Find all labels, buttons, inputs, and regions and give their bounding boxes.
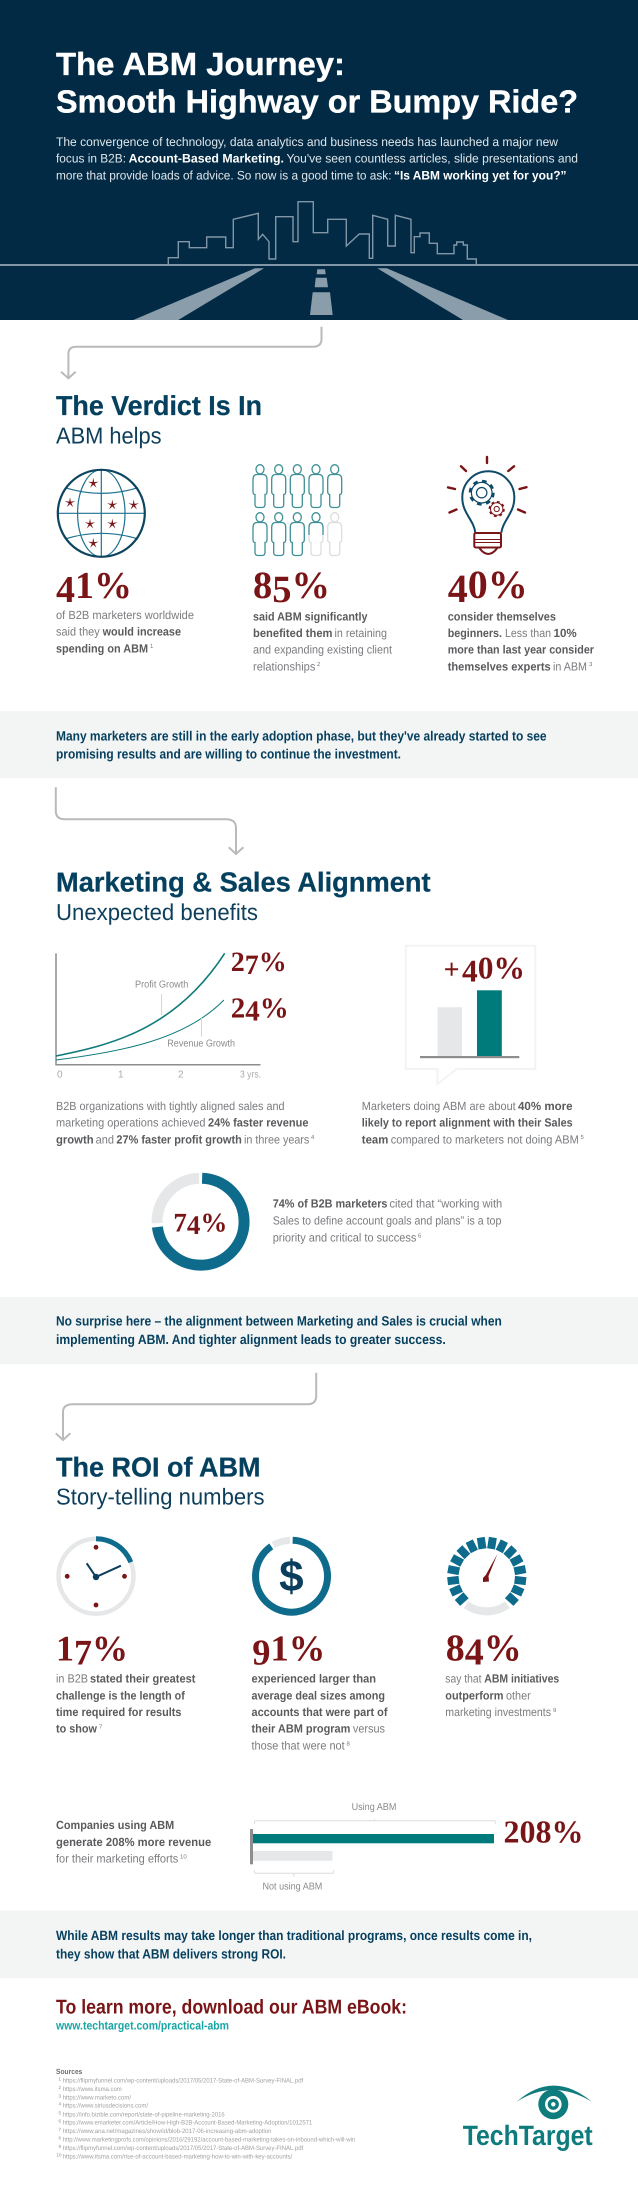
panel: the verdict is in (56, 390, 594, 673)
sources: 10 (56, 2152, 62, 2157)
stat: 41%: would increase (102, 625, 181, 639)
heading: The ROI of ABM (56, 1452, 260, 1483)
stat: 84%: ABM initiatives (484, 1671, 560, 1685)
stat: 85%: 5 (272, 569, 292, 611)
sources: https://flipmyfunnel.com/wp-content/uploads/2017/05/2017-State-of-ABM-Survey-FINAL.pdf (63, 2145, 303, 2152)
stat: 91%: versus (353, 1722, 385, 1736)
sources: 7 (58, 2127, 62, 2132)
donut chart: 74% (157, 1178, 244, 1265)
heading: Marketing & Sales Alignment (56, 867, 431, 898)
callout band: early adoption: promising results and are willing to continue the investment. (56, 747, 401, 762)
text: companies using ABM: 10 (180, 1854, 187, 1860)
subheading: Story-telling numbers (56, 1483, 264, 1509)
callout: +40% bar chart: 4 (462, 953, 478, 988)
line chart: growth: 7 (245, 950, 259, 981)
horizon line (0, 264, 638, 266)
title: Smooth Highway or Bumpy Ride? (56, 83, 578, 119)
text: 74% of B2B marketers: 74% of B2B marketers (273, 1197, 388, 1211)
stat: 41% (56, 565, 194, 655)
callout band: no surprise (0, 1297, 638, 1364)
text: faster growth: and (96, 1132, 114, 1146)
stat: 91%: 9 (252, 1632, 271, 1673)
callout band: early adoption (0, 711, 638, 778)
icon: light bulb (448, 457, 526, 554)
stat: 84%: 9 (553, 1707, 557, 1714)
text: report alignment: compared to marketers not doing ABM (391, 1132, 579, 1146)
sources: 1 (58, 2076, 62, 2082)
stat: 91%: their ABM program (252, 1722, 350, 1736)
panel: the ROI of ABM (56, 1452, 584, 1892)
bar chart: 208%: 208% (504, 1813, 584, 1849)
stat: 84%: other (506, 1688, 531, 1702)
stat: 40%: more than last year consider (448, 643, 594, 657)
stat: 40%: Less than (505, 626, 551, 640)
stat: 85%: in retaining (334, 626, 387, 640)
sources: https://www.emarketer.com/Article/How-High-B2B-Account-Based-Marketing-Adoption/1012571 (63, 2120, 313, 2127)
intro text: The convergence of technology, data analytics and business needs has launched a major new (56, 135, 558, 149)
stat: 17%: challenge is the length of (56, 1688, 185, 1702)
bar chart: 208%: Not using ABM (262, 1881, 322, 1892)
sources: https://www.itsma.com (63, 2086, 122, 2093)
stat: 40%: 10% (554, 626, 577, 640)
callout band: strong ROI (0, 1911, 638, 1978)
title: The ABM Journey: (56, 46, 345, 82)
stat: 40%: themselves experts (448, 659, 551, 673)
sources: Sources (56, 2067, 82, 2076)
stat: 91%: those that were not (252, 1739, 345, 1753)
stat: 91%: 1% (271, 1628, 325, 1669)
text: companies using ABM: Companies using ABM (56, 1818, 174, 1832)
call to action: www.techtarget.com/practical-abm (55, 2018, 229, 2032)
arrow: to marketing and sales (56, 787, 243, 854)
stat: 17%: 7 (74, 1633, 92, 1673)
stat: 91%: 8 (346, 1740, 350, 1748)
callout: +40% bar chart (406, 946, 535, 1084)
stat: 91%: accounts that were part of (252, 1705, 388, 1719)
text: companies using ABM (56, 1818, 212, 1866)
stat: 41%: said they (56, 625, 100, 639)
line chart: growth: 2 (178, 1069, 184, 1080)
icon: globe (58, 470, 145, 557)
line chart: growth: 4 (245, 996, 260, 1028)
stat: 41%: of B2B marketers worldwide (56, 608, 194, 622)
skyline (168, 202, 476, 265)
stat: 85%: relationships (253, 659, 315, 673)
text: 74% of B2B marketers: priority and critical to success (273, 1231, 416, 1245)
stat: 85% (253, 565, 393, 673)
intro text (56, 135, 578, 182)
stat: 84%: say that (445, 1671, 482, 1685)
stat: 40%: beginners. (448, 626, 502, 640)
arrow: to ROI (56, 1373, 316, 1440)
arrow: to verdict (61, 327, 322, 378)
call to action (55, 1996, 407, 2032)
donut chart: 74%: % (200, 1208, 227, 1238)
stat: 85%: % (292, 565, 330, 607)
text: 74% of B2B marketers: cited that “working with (390, 1197, 502, 1211)
donut chart: 74%: 7 (173, 1208, 187, 1238)
stat: 41%: spending on ABM (56, 641, 148, 655)
stat: 40% (448, 562, 594, 673)
call to action: To learn more, download our ABM eBook: (56, 1996, 407, 2018)
text: 74% of B2B marketers (273, 1197, 502, 1245)
line chart: growth: % (260, 993, 289, 1025)
text: faster growth: growth (56, 1132, 94, 1146)
sources: http://www.marketingprofs.com/opinions/2016/29192/account-based-marketing-takes-on-inbound-which-will-win (63, 2136, 356, 2143)
stat: 40%: in ABM (553, 659, 587, 673)
callout band: early adoption: Many marketers are still in the early adoption phase, but they've already started to see (56, 728, 547, 743)
text: faster growth: 27% faster profit growth (116, 1132, 242, 1146)
text: faster growth: 4 (311, 1134, 315, 1141)
callout band: strong ROI: While ABM results may take longer than traditional programs, once results come in, (56, 1928, 532, 1943)
stat: 85%: 8 (253, 565, 272, 607)
sources: 2 (58, 2085, 62, 2090)
stat: 85%: and expanding existing client (253, 643, 393, 657)
title (56, 46, 578, 119)
text: 74% of B2B marketers: 6 (418, 1232, 422, 1240)
sources: 6 (58, 2119, 62, 2124)
text: report alignment: 40% more (518, 1099, 573, 1113)
intro text: Account-Based Marketing. (129, 152, 284, 166)
sources (56, 2067, 356, 2160)
road (133, 268, 508, 320)
stat: 41%: 1% (75, 565, 132, 607)
sources: 3 (58, 2093, 62, 2098)
donut chart: 74%: 4 (187, 1210, 200, 1240)
stat: 40%: 4 (448, 566, 468, 611)
sources: 4 (58, 2102, 62, 2107)
panel: header (0, 0, 638, 320)
sources: https://www.siriusdecisions.com/ (63, 2103, 148, 2110)
text: faster growth: in three years (244, 1132, 309, 1146)
callout: +40% bar chart: 0% (478, 950, 525, 985)
icon: dollar (256, 1540, 328, 1612)
stat: 84%: 8 (446, 1628, 465, 1670)
heading: The Verdict Is In (56, 390, 262, 421)
stat: 84%: % (484, 1628, 522, 1670)
stat: 40%: consider themselves (448, 609, 556, 623)
line chart: growth: Revenue Growth (167, 1039, 235, 1050)
stat: 17%: 7 (99, 1724, 103, 1730)
line chart: growth: 0 (57, 1069, 63, 1080)
stat: 91%: experienced larger than (252, 1671, 376, 1685)
intro text: more that provide loads of advice. So now is a good time to ask: (56, 168, 392, 182)
text: report alignment: Marketers doing ABM are about (362, 1099, 516, 1113)
stat: 40%: 0% (468, 562, 528, 607)
logo: TechTarget: TechTarget (463, 2120, 593, 2151)
stat: 41%: 1 (150, 643, 154, 650)
line chart: growth: 3 yrs. (240, 1069, 261, 1080)
stat: 84% (445, 1628, 560, 1719)
intro text: “Is ABM working yet for you?” (394, 168, 566, 182)
sources: 9 (58, 2144, 62, 2149)
stat: 85%: benefited them (253, 626, 332, 640)
callout: +40% bar chart: + (444, 954, 460, 985)
stat: 85%: said ABM significantly (253, 609, 368, 623)
text: report alignment: team (362, 1132, 388, 1146)
callout band: strong ROI: they show that ABM delivers strong ROI. (56, 1946, 286, 1961)
sources: 8 (58, 2135, 62, 2140)
stat: 17%: in B2B (56, 1671, 88, 1685)
line chart: growth: Profit Growth (135, 979, 188, 990)
text: faster growth: B2B organizations with tightly aligned sales and (56, 1099, 284, 1113)
sources: https://www.itsma.com/rise-of-account-based-marketing-how-to-win-with-key-accounts/ (63, 2153, 292, 2160)
text: companies using ABM: for their marketing efforts (56, 1852, 178, 1866)
stat: 91%: average deal sizes among (252, 1688, 385, 1702)
text: report alignment: 5 (580, 1134, 584, 1141)
stat: 84%: marketing investments (445, 1705, 551, 1719)
stat: 40%: 3 (589, 661, 593, 668)
stat: 84%: outperform (445, 1688, 504, 1702)
bar chart: 208% (250, 1802, 584, 1892)
icon: clock (58, 1539, 134, 1614)
stat: 17%: % (92, 1629, 128, 1669)
icon: dollar: $ (279, 1552, 304, 1601)
intro text: You've seen countless articles, slide presentations and (286, 152, 578, 166)
intro text: focus in B2B: (56, 152, 126, 166)
text: faster growth: marketing operations achieved (56, 1116, 206, 1130)
stat: 17%: stated their greatest (90, 1671, 195, 1685)
subheading: ABM helps (56, 422, 162, 448)
text: faster growth: 24% faster revenue (208, 1116, 309, 1130)
sources: https://www.ana.net/magazines/show/id/blob-2017-06-increasing-abm-adoption (63, 2128, 272, 2135)
stat: 17%: 1 (56, 1629, 74, 1669)
line chart: growth: 1 (118, 1069, 124, 1080)
text: report alignment (362, 1099, 584, 1146)
stat: 17%: to show (56, 1722, 98, 1736)
text: 74% of B2B marketers: Sales to define account goals and plans” is a top (273, 1214, 502, 1228)
stat: 84%: 4 (465, 1632, 484, 1674)
bar chart: 208%: Using ABM (352, 1802, 396, 1813)
text: faster growth (56, 1099, 315, 1146)
line chart: growth: % (259, 947, 287, 978)
callout band: no surprise: implementing ABM. And tighter alignment leads to greater success. (56, 1332, 446, 1347)
panel: marketing and sales alignment (56, 867, 584, 1265)
icon: gauge (448, 1537, 526, 1611)
icon: people (253, 465, 342, 556)
stat: 17%: time required for results (56, 1705, 182, 1719)
subheading: Unexpected benefits (56, 899, 258, 925)
logo: TechTarget (463, 2086, 593, 2151)
stat: 91% (252, 1628, 388, 1753)
stat: 17% (56, 1629, 195, 1736)
line chart: growth (56, 947, 289, 1080)
stat: 41%: 4 (56, 569, 75, 611)
line chart: growth: 2 (231, 947, 245, 978)
sources: https://flipmyfunnel.com/wp-content/uploads/2017/05/2017-State-of-ABM-Survey-FINAL.pdf (63, 2078, 303, 2085)
sources: 5 (58, 2110, 62, 2115)
stat: 85%: 2 (317, 661, 321, 668)
callout band: no surprise: No surprise here – the alignment between Marketing and Sales is crucial when (56, 1314, 502, 1329)
sources: https://info.bizible.com/report/state-of-pipeline-marketing-2016 (63, 2111, 225, 2118)
sources: https://www.marketo.com/ (63, 2094, 131, 2101)
text: companies using ABM: generate 208% more revenue (56, 1835, 212, 1849)
text: report alignment: likely to report alignment with their Sales (362, 1116, 573, 1130)
line chart: growth: 2 (231, 993, 245, 1025)
